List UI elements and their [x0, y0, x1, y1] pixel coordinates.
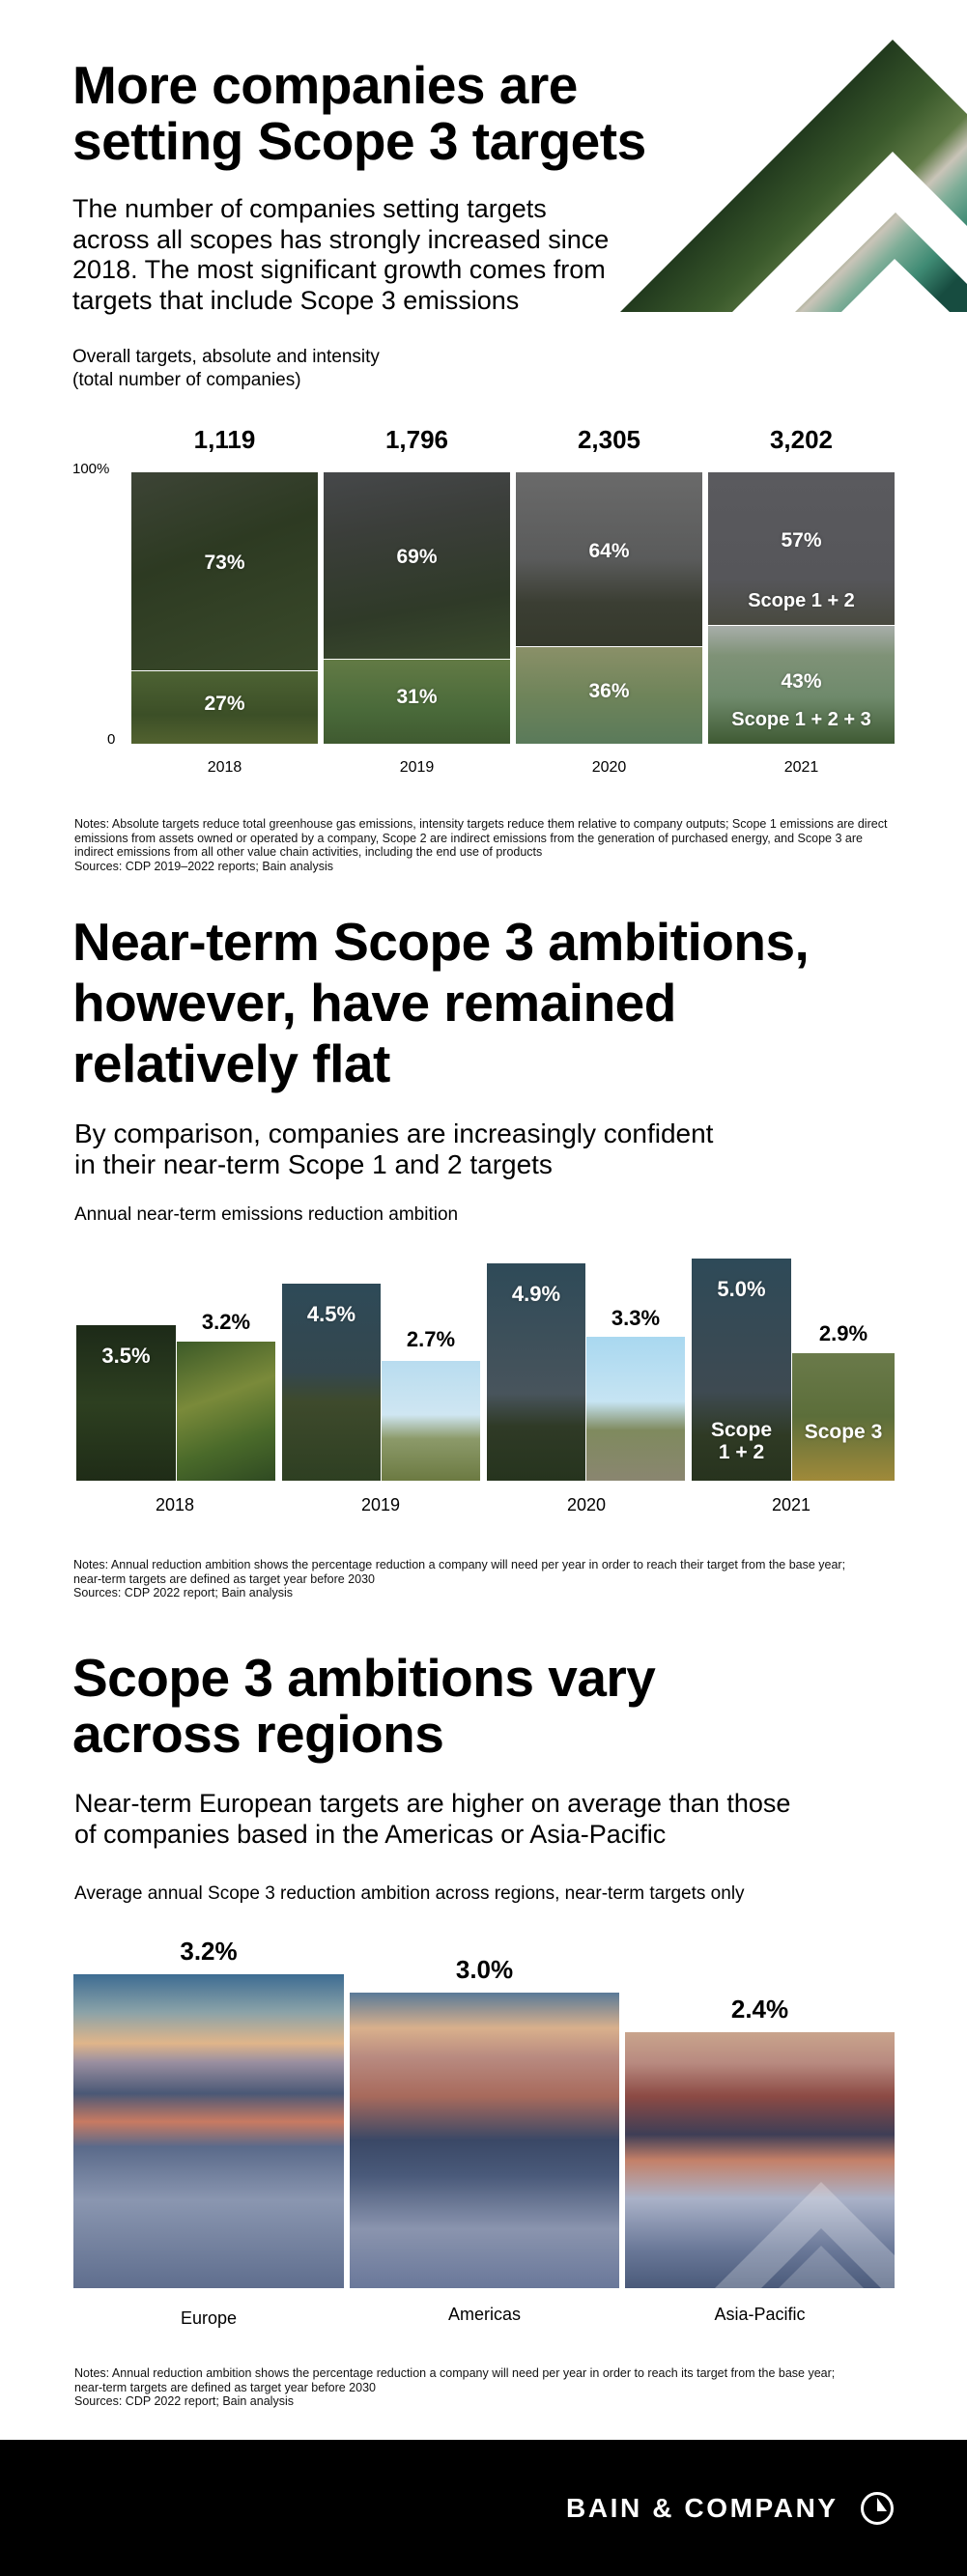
bar: 2021: 57%	[781, 529, 822, 552]
bar: Asia-Pacific	[625, 1995, 895, 2324]
bar: 2020: 64%	[588, 540, 630, 562]
x-axis year labels: 2020	[567, 1495, 606, 1514]
bar: 2020: 2,305	[578, 425, 640, 454]
bar: Americas	[350, 1955, 619, 2324]
subtitle: section 2: in their near-term Scope 1 and 2 targets	[74, 1149, 553, 1179]
bar: 2019: 1,796	[385, 425, 448, 454]
bar: 2021	[708, 425, 895, 776]
notes: chart 2	[73, 1558, 845, 1599]
bar: 2018	[131, 425, 318, 776]
axis label 0: 0	[107, 731, 115, 748]
x-axis year labels: 2021	[772, 1495, 811, 1514]
notes: chart 2: Notes: Annual reduction ambition shows the percentage reduction a company will need per year in order to reach their target from the base year;	[73, 1558, 845, 1571]
bar: Americas: 3.0%	[456, 1955, 513, 1984]
logo text: BAIN & COMPANY	[566, 2493, 839, 2523]
icon: forest chevron graphic	[620, 40, 967, 312]
bar: 2020: 36%	[588, 680, 630, 702]
bar group: 2020: 3.3%	[611, 1306, 660, 1330]
chart: regional ambition bars	[73, 1937, 895, 2328]
notes: chart 1: Sources: CDP 2019–2022 reports; Bain analysis	[74, 860, 333, 873]
subtitle: section 2: By comparison, companies are increasingly confident	[74, 1118, 713, 1148]
subtitle: section 1	[72, 194, 609, 315]
bar: 2020	[516, 425, 702, 776]
bar: 2021: 3,202	[770, 425, 833, 454]
bar: 2020: 2020	[592, 759, 626, 776]
bar: 2021: Scope 1 + 2 + 3	[731, 709, 871, 730]
title: section 3	[72, 1648, 655, 1764]
axis label 100%: 100%	[72, 461, 109, 477]
notes: chart 1	[74, 817, 887, 873]
bar group: 2018	[76, 1310, 275, 1481]
title: section 2: relatively flat	[72, 1033, 390, 1093]
bar: 2021: 2021	[784, 759, 818, 776]
title: section 2: Near-term Scope 3 ambitions,	[72, 912, 809, 972]
bar group: 2020	[487, 1263, 685, 1481]
bar: 2018: 27%	[204, 693, 245, 715]
bar group: 2021: Scope 3	[805, 1421, 882, 1443]
title: section 2	[72, 912, 809, 1093]
chart label: regions: Average annual Scope 3 reduction ambition across regions, near-term targets only	[74, 1883, 745, 1904]
x-axis year labels: 2018	[156, 1495, 194, 1514]
notes: chart 1: Notes: Absolute targets reduce total greenhouse gas emissions, intensity targets reduce them relative to company outputs; Scope 1 emissions are direct	[74, 817, 887, 831]
chart label: annual ambition: Annual near-term emissions reduction ambition	[74, 1204, 458, 1225]
title: section 1: More companies are	[72, 55, 578, 115]
chart label: overall targets	[72, 347, 380, 390]
bar group: 2021	[692, 1259, 895, 1481]
notes: chart 3: Sources: CDP 2022 report; Bain analysis	[74, 2394, 294, 2408]
x-axis year labels: 2019	[361, 1495, 400, 1514]
icon: watermark chevrons	[715, 2182, 895, 2288]
bar: 2019: 69%	[396, 546, 438, 568]
title: section 1	[72, 55, 646, 171]
bar: 2018: 2018	[208, 759, 242, 776]
subtitle: section 3: of companies based in the Americas or Asia-Pacific	[74, 1820, 666, 1849]
bar: 2018: 73%	[204, 552, 245, 574]
chart label: overall targets: (total number of companies)	[72, 370, 301, 390]
title: section 2: however, have remained	[72, 973, 676, 1033]
bar: 2018: 1,119	[194, 425, 255, 454]
bar: Asia-Pacific: 2.4%	[731, 1995, 788, 2024]
bar group: 2020: 4.9%	[512, 1282, 560, 1306]
bar group: 2021: 2.9%	[819, 1321, 867, 1345]
notes: chart 3: near-term targets are defined as target year before 2030	[74, 2380, 376, 2393]
bar: 2019	[324, 425, 510, 776]
chart label: overall targets: Overall targets, absolute and intensity	[72, 347, 380, 367]
notes: chart 1: indirect emissions from all other value chain activities, including the end use of products	[74, 845, 542, 859]
subtitle: section 3	[74, 1789, 790, 1849]
title: section 3: across regions	[72, 1704, 443, 1764]
subtitle: section 1: 2018. The most significant growth comes from	[72, 255, 606, 284]
bar: Europe	[73, 1937, 344, 2328]
bar group: 2021: 1 + 2	[719, 1441, 764, 1463]
bar: 2021: 43%	[781, 670, 822, 693]
bar: 2021: Scope 1 + 2	[748, 590, 855, 611]
bar group: 2019: 2.7%	[407, 1327, 455, 1351]
bar: Americas: Americas	[448, 2305, 521, 2324]
x-axis year labels	[156, 1495, 811, 1514]
subtitle: section 1: The number of companies setting targets	[72, 194, 547, 223]
notes: chart 3: Notes: Annual reduction ambition shows the percentage reduction a company will need per year in order to reach its target from the base year;	[74, 2366, 835, 2380]
chart: overall targets stacked bars	[72, 425, 895, 776]
bar: Asia-Pacific: Asia-Pacific	[714, 2305, 806, 2324]
notes: chart 3	[74, 2366, 835, 2408]
footer: black band with logo	[0, 2440, 967, 2576]
bar: Europe: 3.2%	[180, 1937, 238, 1966]
bar: 2019: 2019	[400, 759, 434, 776]
bar group: 2021: 5.0%	[717, 1277, 766, 1301]
notes: chart 1: emissions from assets owned or operated by a company, Scope 2 are indirect emissions from the generation of purchased energy, and Scope 3 are	[74, 831, 863, 844]
subtitle: section 1: across all scopes has strongly increased since	[72, 224, 609, 253]
bar group: 2021: Scope	[711, 1419, 772, 1441]
bar group: 2018: 3.5%	[101, 1344, 151, 1368]
subtitle: section 3: Near-term European targets are higher on average than those	[74, 1789, 790, 1818]
subtitle: section 1: targets that include Scope 3 emissions	[72, 286, 519, 315]
bar group: 2019	[282, 1284, 480, 1481]
bar: Europe: Europe	[181, 2308, 237, 2328]
bar group: 2018: 3.2%	[202, 1310, 250, 1334]
subtitle: section 2	[74, 1118, 713, 1179]
bar group: 2019: 4.5%	[307, 1302, 356, 1326]
chart: annual near-term ambition bars	[76, 1259, 895, 1514]
notes: chart 2: near-term targets are defined as target year before 2030	[73, 1572, 375, 1586]
notes: chart 2: Sources: CDP 2022 report; Bain analysis	[73, 1586, 293, 1599]
bar: 2019: 31%	[396, 686, 438, 708]
icon: logo circle	[861, 2492, 894, 2525]
title: section 3: Scope 3 ambitions vary	[72, 1648, 655, 1708]
title: section 1: setting Scope 3 targets	[72, 111, 646, 171]
